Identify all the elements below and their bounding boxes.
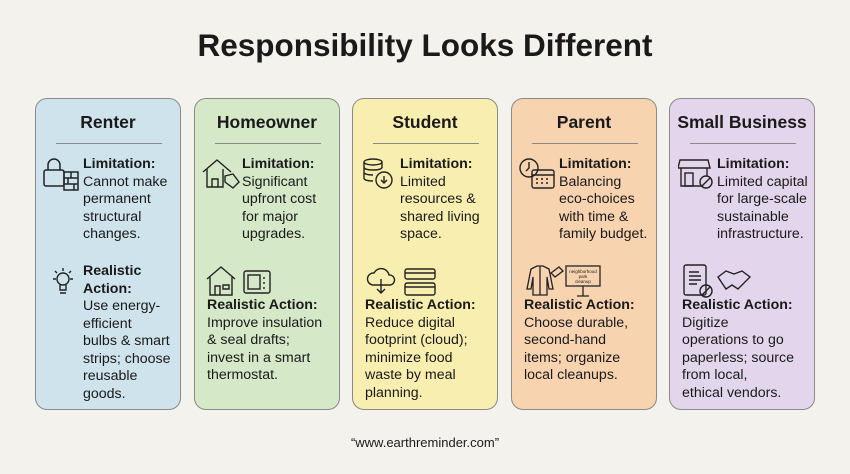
text: limitation bbox=[242, 156, 316, 242]
text: action: goods. bbox=[83, 386, 126, 402]
icon: jacket and cleanup sign: park bbox=[579, 274, 588, 279]
panel: parent bbox=[511, 98, 657, 410]
icon: house and thermostat bbox=[206, 266, 271, 296]
text: limitation: space. bbox=[400, 226, 442, 242]
text: action: & seal drafts; bbox=[207, 332, 290, 348]
text: action: second-hand bbox=[524, 332, 606, 348]
text: action: Digitize bbox=[682, 314, 729, 330]
text: limitation: for large-scale bbox=[717, 191, 807, 207]
icon: coins bbox=[363, 158, 393, 189]
text: action bbox=[365, 297, 476, 400]
panel: renter: Renter bbox=[80, 112, 136, 132]
text: action: operations to go bbox=[682, 332, 784, 348]
text: action: reusable bbox=[83, 368, 137, 384]
text: action: Realistic Action: bbox=[524, 297, 635, 313]
icon: jacket and cleanup sign bbox=[526, 265, 601, 297]
panel: small business: Small Business bbox=[677, 112, 807, 132]
text: limitation: changes. bbox=[83, 226, 141, 242]
text: action: Realistic bbox=[83, 263, 141, 279]
text: limitation bbox=[559, 156, 647, 242]
panel: student: Student bbox=[392, 112, 458, 132]
text: limitation: Limited bbox=[400, 174, 446, 190]
text: limitation: Limitation: bbox=[400, 156, 473, 172]
panel: homeowner bbox=[194, 98, 340, 410]
text: action: Use energy- bbox=[83, 298, 160, 314]
icon: bulb bbox=[53, 268, 73, 294]
text: action: strips; choose bbox=[83, 350, 171, 366]
text: action bbox=[524, 297, 635, 383]
icon: tablet and handshake bbox=[683, 264, 751, 298]
text: limitation: Significant bbox=[242, 174, 307, 190]
text: limitation: permanent bbox=[83, 191, 151, 207]
text: limitation: Limitation: bbox=[717, 156, 790, 172]
text: action: items; organize bbox=[524, 350, 620, 366]
text: limitation bbox=[83, 156, 167, 242]
text: limitation: Limitation: bbox=[242, 156, 315, 172]
text: action: local cleanups. bbox=[524, 367, 618, 383]
footer: “www.earthreminder.com” bbox=[351, 435, 499, 450]
text: action: Improve insulation bbox=[207, 314, 322, 330]
text: action: Action: bbox=[83, 280, 132, 296]
text: action: footprint (cloud); bbox=[365, 332, 468, 348]
text: action: ethical vendors. bbox=[682, 384, 781, 400]
text: action: efficient bbox=[83, 316, 132, 332]
text: limitation: for major bbox=[242, 208, 298, 224]
text: limitation: upfront cost bbox=[242, 191, 316, 207]
text: limitation: eco-choices bbox=[559, 191, 635, 207]
icon: house with price tag bbox=[202, 159, 240, 189]
text: limitation: sustainable bbox=[717, 208, 789, 224]
panel: student bbox=[352, 98, 498, 410]
text: action bbox=[682, 297, 794, 400]
text: action bbox=[83, 263, 171, 402]
text: action: Realistic Action: bbox=[365, 297, 476, 313]
text: action: Reduce digital bbox=[365, 314, 455, 330]
text: action: invest in a smart bbox=[207, 350, 310, 366]
text: limitation: upgrades. bbox=[242, 226, 305, 242]
text: limitation: Limitation: bbox=[83, 156, 156, 172]
icon: clock and calendar bbox=[519, 158, 555, 189]
text: action: from local, bbox=[682, 367, 747, 383]
text: action: planning. bbox=[365, 384, 423, 400]
text: limitation: infrastructure. bbox=[717, 226, 804, 242]
panel: homeowner: Homeowner bbox=[217, 112, 317, 132]
text: limitation: family budget. bbox=[559, 226, 647, 242]
text: action: paperless; source bbox=[682, 350, 794, 366]
text: action: Choose durable, bbox=[524, 314, 628, 330]
text: action: Realistic Action: bbox=[682, 297, 793, 313]
panel: parent: Parent bbox=[557, 112, 611, 132]
text: limitation bbox=[717, 156, 808, 242]
text: limitation: Cannot make bbox=[83, 174, 167, 190]
text: action: waste by meal bbox=[365, 367, 456, 383]
text: action: thermostat. bbox=[207, 367, 278, 383]
icon: lock and wall bbox=[43, 158, 79, 191]
text: limitation: structural bbox=[83, 208, 141, 224]
icon: jacket and cleanup sign: neighborhood bbox=[569, 269, 597, 274]
text: action bbox=[207, 297, 322, 383]
text: action: Realistic Action: bbox=[207, 297, 318, 313]
icon: store bbox=[678, 159, 713, 189]
panel: renter bbox=[35, 98, 181, 410]
text: limitation: Limited capital bbox=[717, 174, 808, 190]
panel: small business bbox=[669, 98, 815, 410]
icon: cloud and containers bbox=[366, 268, 436, 296]
text: limitation: with time & bbox=[559, 208, 628, 224]
text: limitation: Balancing bbox=[559, 174, 621, 190]
title: Responsibility Looks Different bbox=[197, 27, 653, 63]
icon: jacket and cleanup sign: cleanup bbox=[575, 279, 591, 284]
text: limitation: shared living bbox=[400, 208, 480, 224]
text: action: bulbs & smart bbox=[83, 333, 170, 349]
text: action: minimize food bbox=[365, 350, 453, 366]
text: limitation bbox=[400, 156, 480, 242]
text: limitation: resources & bbox=[400, 191, 476, 207]
text: limitation: Limitation: bbox=[559, 156, 632, 172]
